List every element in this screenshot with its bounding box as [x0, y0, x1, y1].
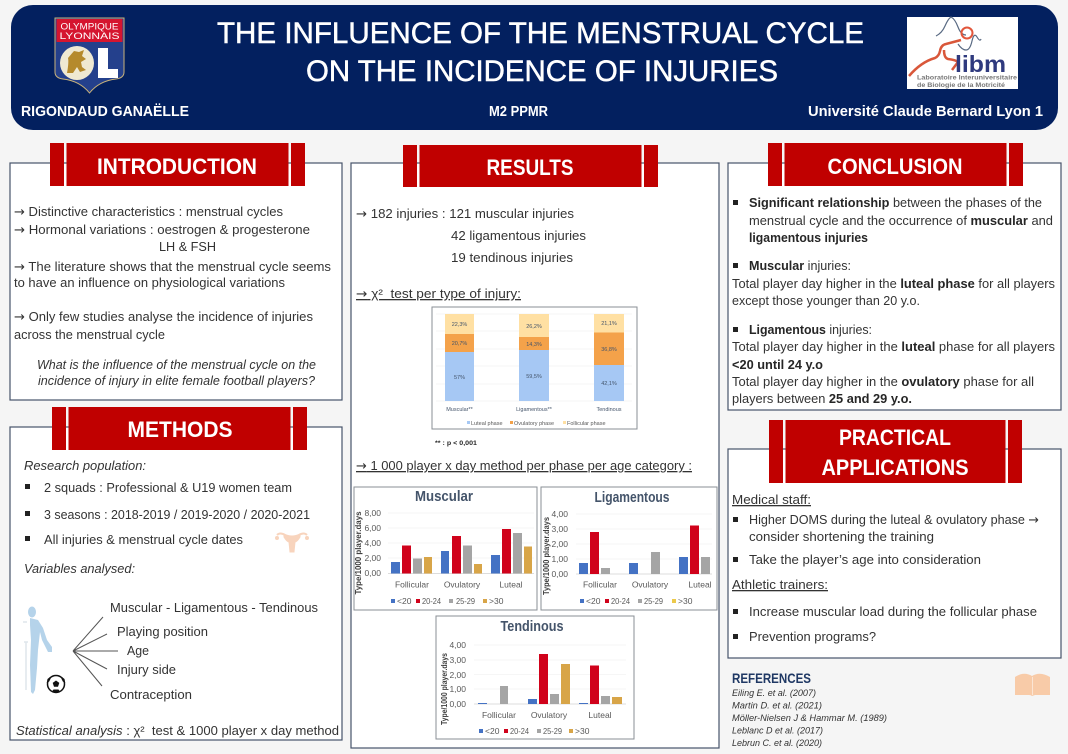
bar chart: muscular: <20: [397, 596, 412, 606]
bar chart: tendinous: Type/1000 player.days: [440, 653, 449, 725]
references: REFERENCES: [732, 670, 811, 686]
bar chart: muscular: Ovulatory: [444, 580, 481, 590]
bar chart: ligamentous: <20: [586, 596, 601, 606]
heading: practical applications: APPLICATIONS: [822, 455, 968, 480]
text: introduction points: LH & FSH: [159, 239, 216, 254]
heading: results: RESULTS: [486, 155, 574, 180]
text: injury counts: 19 tendinous injuries: [451, 250, 574, 265]
heading: methods: METHODS: [128, 417, 232, 442]
bar chart: ligamentous: 3,00: [551, 524, 568, 534]
research question: [37, 357, 316, 388]
bar chart: tendinous: 4,00: [449, 640, 466, 650]
bar chart: muscular: >30: [489, 596, 504, 606]
stacked bar chart: phase share per injury type: 57%: [454, 375, 465, 381]
text: athletic trainers: Increase muscular load during the follicular phase: [749, 604, 1037, 619]
bar chart: tendinous: <20: [485, 726, 500, 736]
bar chart: tendinous: 2,00: [449, 670, 466, 680]
bar chart: muscular: [354, 487, 537, 610]
bar chart: tendinous: 20-24: [510, 726, 529, 736]
text: variables list: Contraception: [110, 687, 192, 702]
bar chart: tendinous: >30: [575, 726, 590, 736]
stacked bar chart: phase share per injury type: Ovulatory phase: [514, 421, 554, 427]
text: injury counts: 42 ligamentous injuries: [451, 228, 587, 243]
text: introduction points: [14, 204, 331, 342]
text: athletic trainers: Athletic trainers:: [732, 577, 828, 592]
heading: practical applications: [769, 420, 1022, 483]
bar chart: ligamentous: 25-29: [644, 596, 663, 606]
text: medical staff: [732, 492, 1039, 567]
text: research population: 3 seasons : 2018-2019 / 2019-2020 / 2020-2021: [44, 507, 310, 522]
header banner: [11, 5, 1058, 130]
text: variables list: [110, 600, 318, 702]
text: introduction points: across the menstrual cycle: [14, 327, 165, 342]
bar chart: muscular: 25-29: [456, 596, 475, 606]
text: muscular injuries: Total player day higher in the luteal phase for all players: [732, 276, 1055, 291]
text: ligamentous injuries: [732, 322, 1055, 406]
text: research population: All injuries & menstrual cycle dates: [44, 532, 243, 547]
logo: LIBM: Laboratoire Interuniversitaire: [917, 74, 1017, 82]
references: Eiling E. et al. (2007): [732, 688, 816, 699]
stacked bar chart: phase share per injury type: [432, 307, 637, 429]
significance note: ** : p < 0,001: [435, 440, 477, 447]
bar chart: muscular: Muscular: [415, 488, 473, 505]
variable connector lines: [73, 617, 118, 686]
panel: conclusion: [728, 143, 1061, 410]
text: introduction points: to have an influence on physiological variations: [14, 275, 285, 290]
text: muscular injuries: Muscular injuries:: [749, 258, 851, 273]
bar chart: tendinous: 3,00: [449, 655, 466, 665]
icon: soccer ball: [47, 676, 65, 693]
text: player-day method subheading: → 1 000 player x day method per phase per age category :: [356, 458, 692, 474]
text: ligamentous injuries: players between 25 and 29 y.o.: [732, 391, 912, 406]
references: Leblanc D et al. (2017): [732, 726, 823, 736]
text: introduction points: → The literature shows that the menstrual cycle seems: [14, 259, 331, 275]
bar chart: tendinous: Tendinous: [500, 618, 564, 635]
bar chart: tendinous: 25-29: [543, 726, 562, 736]
stacked bar chart: phase share per injury type: 20,7%: [452, 341, 467, 347]
bar chart: ligamentous: [541, 487, 717, 610]
icon: player figure: [23, 606, 52, 694]
bar chart: muscular: Follicular: [395, 580, 429, 590]
title: ON THE INCIDENCE OF INJURIES: [306, 55, 778, 88]
text: variables list: Age: [127, 643, 149, 658]
bar chart: tendinous: Follicular: [482, 710, 516, 720]
panel: introduction: [10, 143, 342, 400]
title: THE INFLUENCE OF THE MENSTRUAL CYCLE: [217, 17, 864, 50]
text: medical staff: Higher DOMS during the luteal & ovulatory phase →: [749, 512, 1039, 528]
bar chart: muscular: 20-24: [422, 596, 441, 606]
text: medical staff: Take the player’s age into consideration: [749, 552, 981, 567]
logo: LIBM: [907, 17, 1018, 89]
bar chart: muscular: 8,00: [364, 508, 381, 518]
text: significant relationship: Significant relationship between the phases of the: [749, 195, 1042, 210]
stacked bar chart: phase share per injury type: 26,2%: [526, 324, 542, 330]
university: Université Claude Bernard Lyon 1: [808, 103, 1043, 120]
bar chart: tendinous: 0,00: [449, 699, 466, 709]
text: variables list: Injury side: [117, 662, 176, 677]
references: Möller-Nielsen J & Hammar M. (1989): [732, 713, 887, 724]
text: significant relationship: ligamentous injuries: [749, 230, 868, 245]
logo: Olympique Lyonnais: OLYMPIQUE: [60, 22, 118, 32]
stacked bar chart: phase share per injury type: Luteal phase: [471, 421, 502, 427]
bar chart: ligamentous: Ligamentous: [594, 489, 670, 506]
text: chi-squared subheading: → χ² test per type of injury:: [356, 286, 521, 302]
references: Martin D. et al. (2021): [732, 700, 822, 712]
bar chart: tendinous: 1,00: [449, 684, 466, 694]
text: ligamentous injuries: Ligamentous injuries:: [749, 322, 872, 337]
bar chart: tendinous: Ovulatory: [531, 710, 568, 720]
text: injury counts: [356, 206, 587, 265]
stacked bar chart: phase share per injury type: Follicular phase: [567, 421, 606, 427]
text: significant relationship: menstrual cycle and the occurrence of muscular and: [749, 213, 1053, 228]
bar chart: muscular: 2,00: [364, 553, 381, 563]
logo: LIBM: de Biologie de la Motricité: [917, 82, 1005, 89]
text: athletic trainers: Prevention programs?: [749, 629, 876, 644]
bar chart: ligamentous: 1,00: [551, 554, 568, 564]
text: ligamentous injuries: Total player day higher in the ovulatory phase for all: [732, 374, 1034, 389]
bar chart: muscular: 6,00: [364, 523, 381, 533]
heading: introduction: INTRODUCTION: [97, 154, 257, 179]
text: statistical analysis: Statistical analysis : χ² test & 1000 player x day method: [16, 723, 339, 738]
bar chart: ligamentous: 2,00: [551, 539, 568, 549]
text: variables list: Playing position: [117, 624, 208, 639]
text: medical staff: Medical staff:: [732, 492, 811, 507]
bar chart: tendinous: Luteal: [588, 710, 612, 720]
text: muscular injuries: [732, 258, 1055, 308]
bar chart: ligamentous: 0,00: [551, 569, 568, 579]
text: introduction points: → Only few studies analyse the incidence of injuries: [14, 309, 313, 325]
text: research population: [24, 458, 310, 547]
text: muscular injuries: except those younger than 20 y.o.: [732, 293, 920, 308]
heading: results: [403, 145, 658, 187]
text: variables analysed heading: Variables analysed:: [24, 561, 135, 576]
bar chart: ligamentous: Follicular: [583, 580, 617, 590]
research question: What is the influence of the menstrual cycle on the: [37, 357, 316, 372]
bar chart: muscular: 0,00: [364, 568, 381, 578]
text: research population: Research population:: [24, 458, 146, 473]
heading: introduction: [50, 143, 305, 186]
text: introduction points: → Hormonal variations : oestrogen & progesterone: [14, 222, 310, 238]
references: Lebrun C. et al. (2020): [732, 738, 822, 749]
bar chart: muscular: Type/1000 player.days: [354, 511, 363, 594]
text: athletic trainers: [732, 577, 1037, 644]
stacked bar chart: phase share per injury type: Tendinous: [596, 407, 622, 413]
bar chart: muscular: Luteal: [499, 580, 523, 590]
heading: practical applications: PRACTICAL: [839, 425, 951, 450]
heading: conclusion: [768, 143, 1023, 186]
stacked bar chart: phase share per injury type: 42,1%: [601, 381, 617, 387]
bar chart: ligamentous: Ovulatory: [632, 580, 669, 590]
research question: incidence of injury in elite female football players?: [38, 373, 316, 388]
stacked bar chart: phase share per injury type: Ligamentous**: [516, 407, 553, 413]
title: [217, 17, 864, 88]
logo: Olympique Lyonnais: [55, 18, 124, 93]
text: ligamentous injuries: Total player day higher in the luteal phase for all players: [732, 339, 1055, 354]
bar chart: tendinous: [436, 616, 634, 739]
stacked bar chart: phase share per injury type: 22,3%: [452, 322, 467, 328]
panel: methods: [10, 407, 342, 740]
panel: results: [351, 145, 719, 748]
icon: uterus: [276, 534, 308, 552]
stacked bar chart: phase share per injury type: 21,1%: [601, 321, 617, 327]
stacked bar chart: phase share per injury type: 59,5%: [526, 374, 542, 380]
text: ligamentous injuries: <20 until 24 y.o: [732, 357, 823, 372]
logo: LIBM: libm: [955, 51, 1006, 77]
references: [732, 670, 887, 749]
stacked bar chart: phase share per injury type: Muscular**: [446, 407, 474, 413]
bar chart: muscular: 4,00: [364, 538, 381, 548]
text: significant relationship: [733, 195, 1053, 245]
bar chart: ligamentous: Luteal: [688, 580, 712, 590]
heading: conclusion: CONCLUSION: [828, 154, 962, 179]
text: introduction points: → Distinctive characteristics : menstrual cycles: [14, 204, 283, 220]
bar chart: ligamentous: 20-24: [611, 596, 630, 606]
stacked bar chart: phase share per injury type: 14,3%: [526, 342, 542, 348]
heading: methods: [52, 407, 307, 450]
author: RIGONDAUD GANAËLLE: [21, 103, 189, 120]
text: medical staff: consider shortening the training: [749, 529, 934, 544]
bar chart: ligamentous: >30: [678, 596, 693, 606]
stacked bar chart: phase share per injury type: 36,8%: [601, 347, 617, 353]
bar chart: ligamentous: 4,00: [551, 509, 568, 519]
bar chart: ligamentous: Type/1000 player.days: [542, 516, 551, 595]
text: variables list: Muscular - Ligamentous - Tendinous: [110, 600, 318, 615]
degree: M2 PPMR: [489, 103, 548, 120]
logo: Olympique Lyonnais: LYONNAIS: [60, 31, 120, 41]
panel: practical applications: [728, 420, 1061, 658]
text: injury counts: → 182 injuries : 121 muscular injuries: [356, 206, 574, 222]
text: research population: 2 squads : Professional & U19 women team: [44, 480, 292, 495]
icon: book: [1015, 674, 1050, 696]
